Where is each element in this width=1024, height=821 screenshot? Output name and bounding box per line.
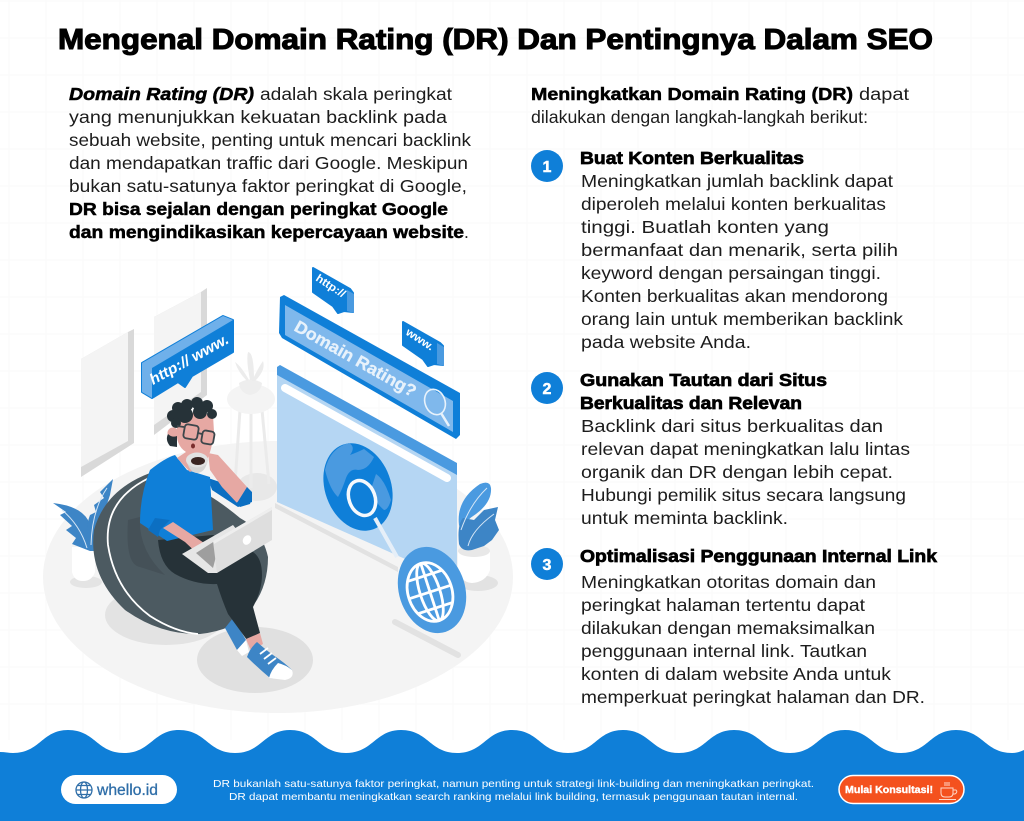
step 3 body text: memperkuat peringkat halaman dan DR. [581,687,925,707]
step 2 heading [580,370,827,413]
step 3 body text: peringkat halaman tertentu dapat [581,595,865,615]
step 3 body text: Meningkatkan otoritas domain dan [581,572,876,592]
step 2 body text: untuk meminta backlink. [581,508,788,528]
left shoe [225,618,249,656]
title: Mengenal Domain Rating (DR) Dan Pentingnya Dalam SEO [58,24,933,56]
windows on the wall [81,288,207,477]
globe badge [387,538,477,655]
button: Mulai Konsultasi! [839,776,964,804]
forearm on laptop [148,518,212,558]
browser window [275,365,457,582]
text block: introduction to the steps: dapat [859,84,909,104]
bubble: http://www. [142,316,233,398]
step 3 body text: konten di dalam website Anda untuk [581,664,891,684]
bubble: http://: http:// [313,272,348,300]
step 1 body text: keyword dengan persaingan tinggi. [581,263,881,283]
bubble: www.: www. [402,326,436,353]
icon: number 2 badge: 2 [543,381,552,398]
step 2 body text: organik dan DR dengan lebih cepat. [581,462,893,482]
step 3 heading: Optimalisasi Penggunaan Internal Link [580,546,937,566]
ankle [246,633,263,651]
bean bag shadow and foot shadow [105,585,313,693]
step 1 body text [581,171,903,352]
head [167,397,217,472]
globe with magnifier [312,433,404,557]
text block: definition of Domain Rating: Domain Rating (DR) [69,84,254,104]
step 1 [531,148,903,352]
bubble: http:// [313,268,354,313]
text block: introduction to the steps: dilakukan dengan langkah-langkah berikut: [531,107,868,127]
plant on the left [53,479,113,588]
icon: number 3 badge [531,548,563,580]
search bar: Domain Rating? [279,295,460,439]
coffee cup [186,452,208,473]
text block: definition of Domain Rating: DR bisa sejalan dengan peringkat Google [69,199,448,219]
step 3 body text [581,572,925,707]
torso [140,455,213,541]
step 2 body text [581,416,910,528]
icon: number 1 badge: 1 [543,159,552,176]
laptop [182,507,272,573]
step 1 body text: bermanfaat dan menarik, serta pilih [581,240,898,260]
footer note: DR bukanlah satu-satunya faktor peringkat, namun penting untuk strategi link-building dan meningkatkan peringkat. [213,778,814,790]
illustration: person with laptop and Domain Rating search window [43,268,513,713]
step 1 body text: orang lain untuk memberikan backlink [581,309,903,329]
raised arm [208,453,252,507]
text block: definition of Domain Rating: dan mengindikasikan kepercayaan website [69,222,464,242]
step 2 body text: Backlink dari situs berkualitas dan [581,416,883,436]
step 1 heading: Buat Konten Berkualitas [580,148,804,168]
search bar: Domain Rating?: Domain Rating? [291,317,420,401]
step 1 body text: Meningkatkan jumlah backlink dapat [581,171,893,191]
curly hair [167,397,217,447]
icon: coffee cup [939,782,957,800]
logo: whello.id: whello.id [96,782,158,799]
side table with plant [227,352,277,501]
bubble: http://www.: http:// www. [147,331,232,388]
text block: definition of Domain Rating: sebuah website, penting untuk mencari backlink [69,130,471,150]
text block: definition of Domain Rating: . [464,222,469,242]
step 2 heading: Berkualitas dan Relevan [580,393,802,413]
text block: definition of Domain Rating: bukan satu-satunya faktor peringkat di Google, [69,176,467,196]
step 2 body text: Hubungi pemilik situs secara langsung [581,485,906,505]
step 3 [531,546,937,707]
step 2 body text: relevan dapat meningkatkan lalu lintas [581,439,910,459]
text block: introduction to the steps: Meningkatkan Domain Rating (DR) [531,84,853,104]
button: Mulai Konsultasi!: Mulai Konsultasi! [845,784,933,796]
person [140,397,293,680]
plant on the right [458,483,499,591]
right shoe [247,642,293,680]
legs [158,535,262,640]
footer band with wave edge [0,730,1024,821]
icon: number 1 badge [531,150,563,182]
floor [43,441,513,713]
step 1 body text: tinggi. Buatlah konten yang [581,217,829,237]
icon: number 2 badge [531,372,563,404]
text block: definition of Domain Rating [69,84,471,242]
footer note: DR dapat membantu meningkatkan search ranking melalui link building, termasuk penggunaan tautan internal. [229,791,798,803]
step 3 body text: penggunaan internal link. Tautkan [581,641,867,661]
icon: number 3 badge: 3 [543,557,552,574]
text block: definition of Domain Rating: dan mendapatkan traffic dari Google. Meskipun [69,153,468,173]
step 1 body text: diperoleh melalui konten berkualitas [581,194,886,214]
logo: whello.id [61,775,177,804]
footer note [213,778,814,803]
step 3 body text: dilakukan dengan memaksimalkan [581,618,875,638]
step 2 heading: Gunakan Tautan dari Situs [580,370,827,390]
step 2 [531,370,910,528]
step 1 body text: pada website Anda. [581,332,751,352]
text block: introduction to the steps [531,84,909,127]
bean bag [93,473,268,634]
text block: definition of Domain Rating: adalah skala peringkat [260,84,452,104]
bubble: www. [402,322,444,366]
step 1 body text: Konten berkualitas akan mendorong [581,286,888,306]
text block: definition of Domain Rating: yang menunjukkan kekuatan backlink pada [69,107,447,127]
